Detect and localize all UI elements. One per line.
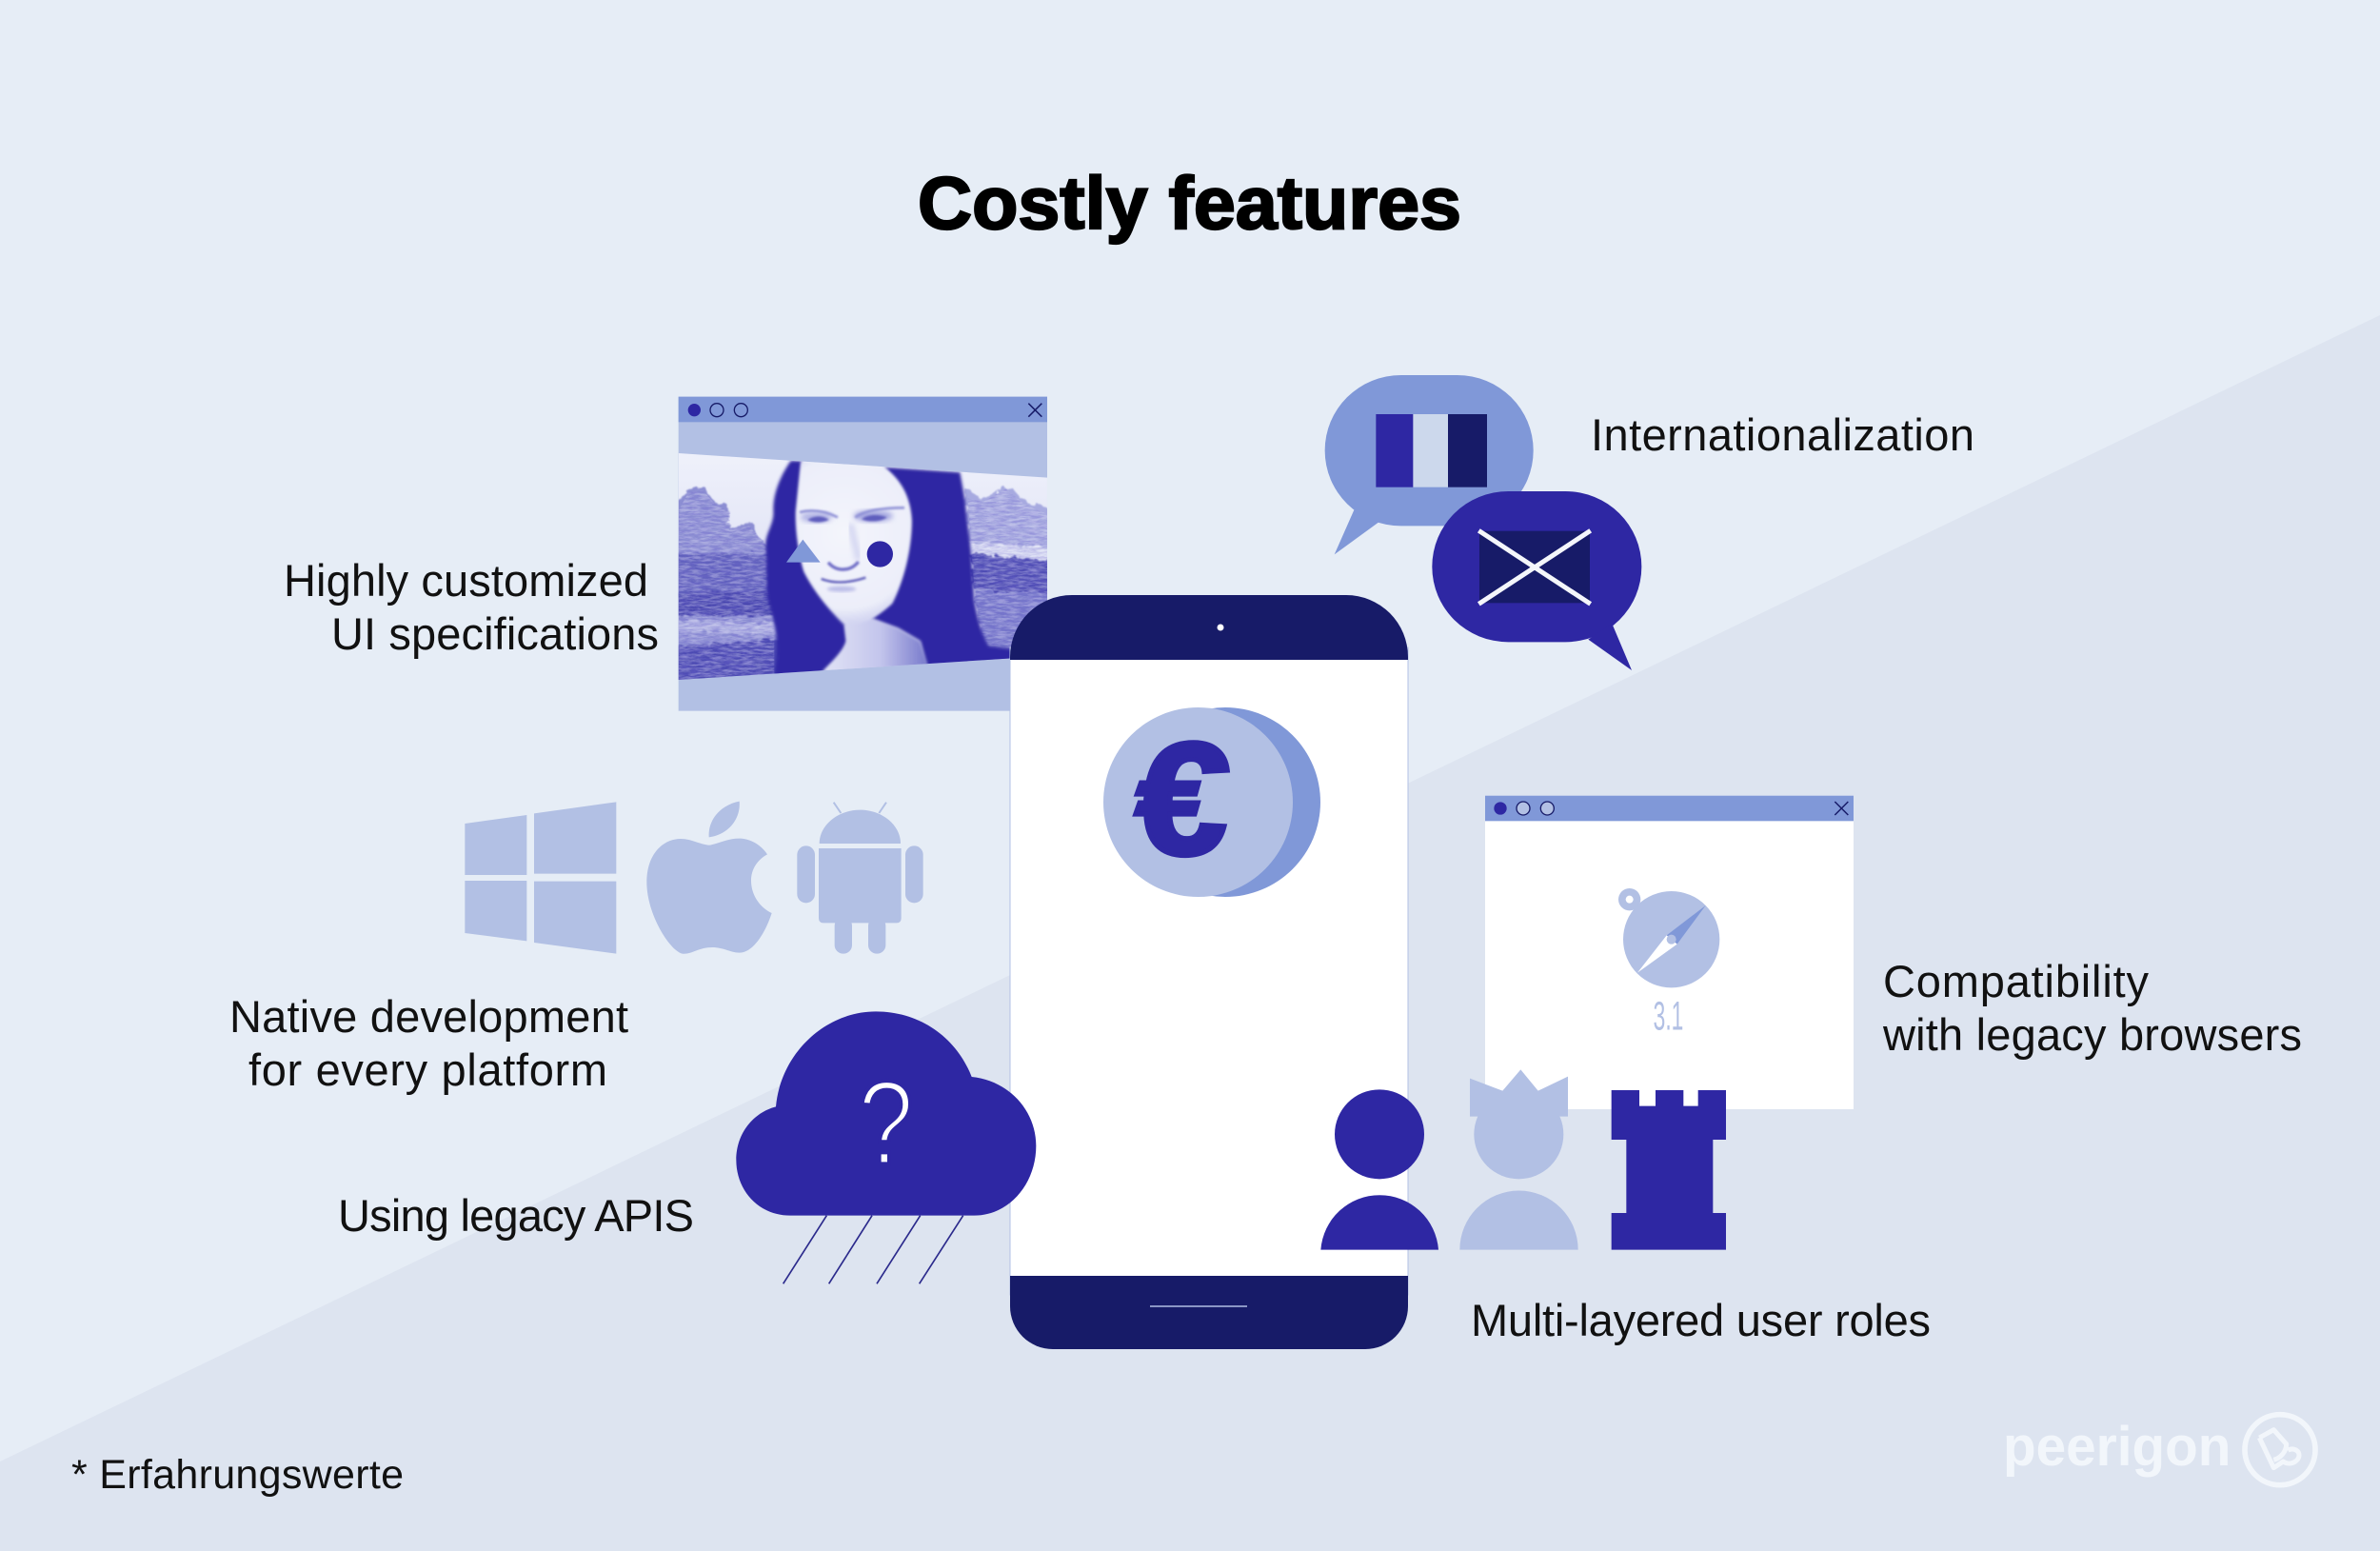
- label: highly customized UI specifications: Highly customized: [284, 555, 648, 606]
- eyes: [801, 512, 832, 523]
- logo: peerigon: peerigon: [2003, 1416, 2231, 1478]
- logo: peerigon: [2003, 1415, 2315, 1485]
- title bar: [1485, 796, 1854, 821]
- mona lisa image: [669, 450, 1057, 686]
- triangle marker: [786, 540, 821, 563]
- label: compatibility: with legacy browsers: [1882, 1009, 2302, 1060]
- icon: safari compass: [1618, 888, 1719, 987]
- dark speech bubble with flag: [1432, 491, 1641, 670]
- hair and dress: [765, 461, 846, 681]
- label: compatibility: Compatibility: [1883, 956, 2150, 1006]
- home button line: [1150, 1305, 1247, 1307]
- version number: 3.1: [1654, 994, 1683, 1040]
- label: multi-layered user roles: Multi-layered user roles: [1471, 1295, 1931, 1345]
- phone: [1010, 595, 1408, 1349]
- icon: euro coin: €: [1129, 709, 1236, 888]
- phone footer: [1010, 1276, 1408, 1349]
- title: Costly features: [918, 161, 1461, 245]
- label: using legacy APIs: Using legacy APIS: [338, 1190, 694, 1241]
- icon: euro coin: [1103, 707, 1320, 897]
- icon: apple: [646, 802, 772, 954]
- icon: rook: [1612, 1090, 1726, 1250]
- footnote: * Erfahrungswerte: [71, 1452, 404, 1498]
- title bar: [679, 397, 1047, 422]
- panel: speech bubbles: [1325, 375, 1641, 670]
- circle marker: [867, 541, 893, 567]
- icon: android: [797, 803, 923, 954]
- icon: question cloud: [736, 1011, 1036, 1283]
- label: native development: [229, 991, 628, 1095]
- phone header: [1010, 595, 1408, 660]
- label: Internationalization: Internationalization: [1591, 409, 1974, 460]
- neck and chest: [823, 618, 928, 672]
- icons: user roles: [1320, 1069, 1726, 1250]
- nose and lips: [850, 524, 859, 560]
- label: compatibility: [1882, 956, 2302, 1060]
- light speech bubble with flag: [1325, 375, 1534, 554]
- face: [797, 462, 911, 625]
- icon: windows: [465, 802, 616, 954]
- panel: mona lisa browser window: [669, 397, 1057, 711]
- icon: question cloud: ?: [858, 1058, 914, 1190]
- icon: admin with crown: [1459, 1069, 1578, 1250]
- icon: user: [1320, 1089, 1438, 1250]
- panel: legacy browser window: [1485, 796, 1854, 1109]
- label: highly customized UI specifications: UI specifications: [331, 608, 659, 659]
- platform icons: [465, 802, 923, 954]
- phone camera: [1217, 625, 1224, 630]
- label: native development: Native development: [229, 991, 628, 1042]
- label: highly customized UI specifications: [284, 555, 659, 659]
- label: native development: for every platform: [248, 1044, 607, 1095]
